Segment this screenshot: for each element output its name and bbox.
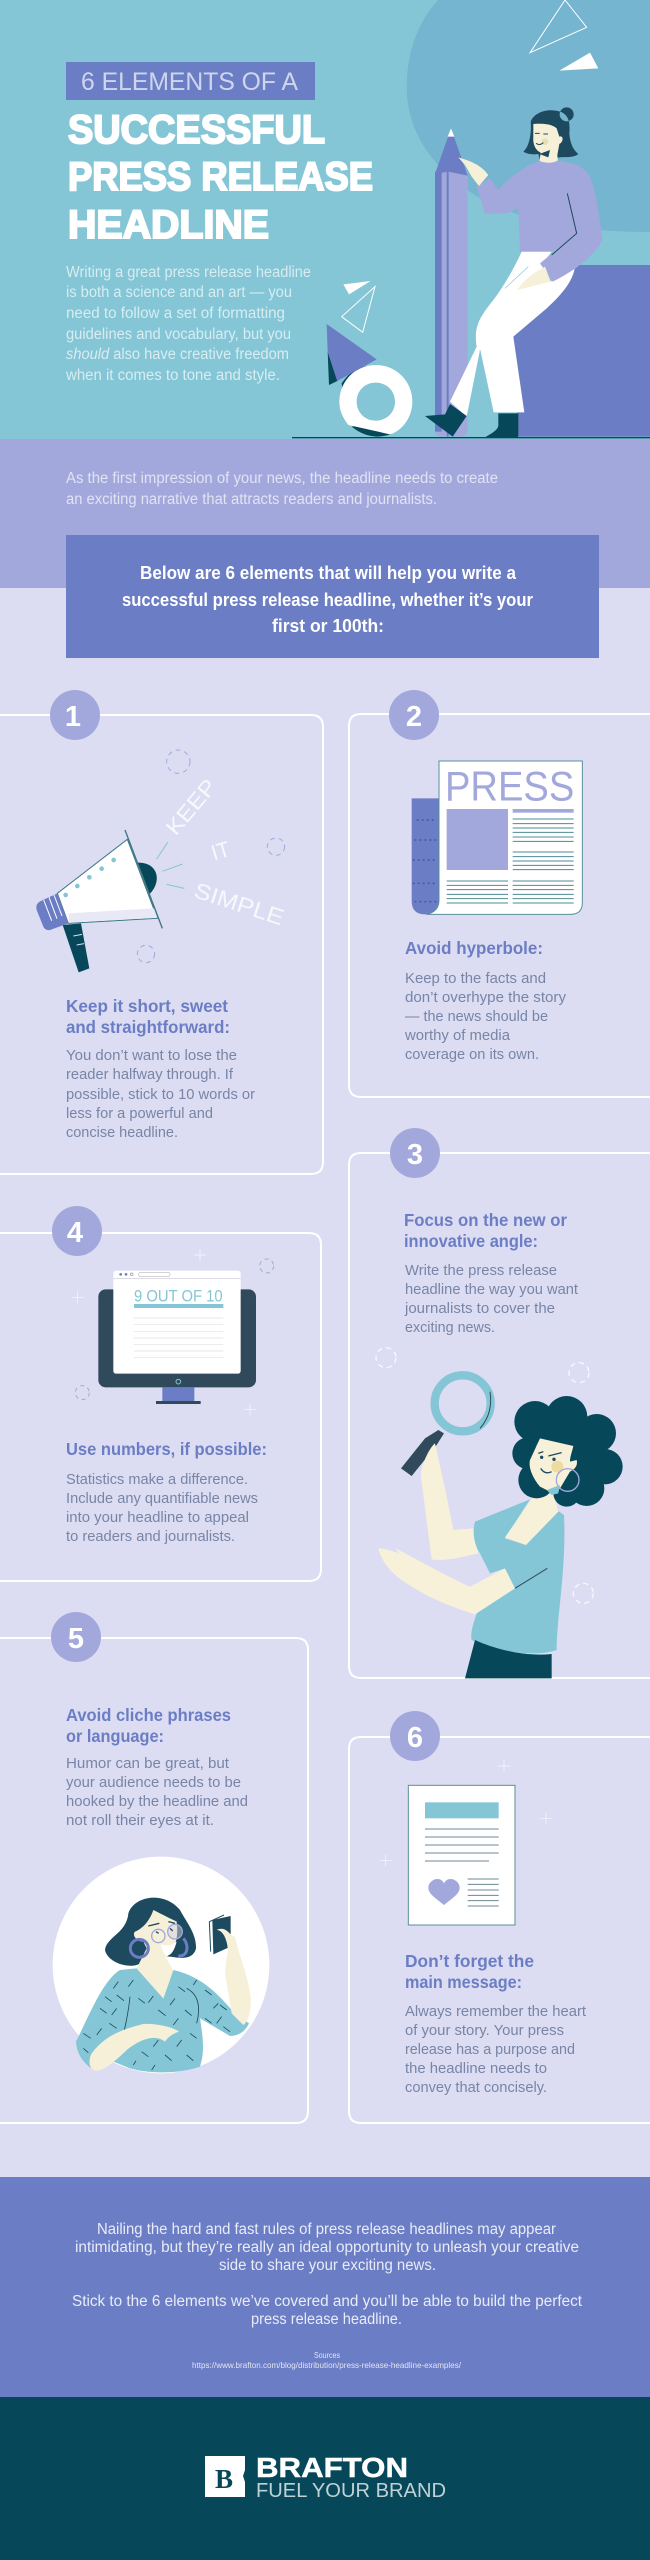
illustration: woman with phone <box>53 1857 269 2073</box>
number badge 5: 5 <box>68 1623 84 1655</box>
number badge 4 <box>52 1206 102 1256</box>
illustration: newspaper <box>412 761 582 914</box>
panel: header <box>0 0 650 440</box>
heading 2: Avoid hyperbole: <box>405 938 543 958</box>
body 4: Include any quantifiable news <box>66 1490 258 1507</box>
body 2: — the news should be <box>405 1008 548 1025</box>
heading 3: Focus on the new or <box>404 1210 567 1230</box>
illustration: megaphone <box>36 750 287 972</box>
body 1: less for a powerful and <box>66 1105 213 1122</box>
number badge 3 <box>390 1128 440 1178</box>
ring shape <box>339 365 412 437</box>
keep it simple words <box>161 774 287 930</box>
illustration: woman with pencil and shapes <box>292 0 650 438</box>
illustration: newspaper: PRESS <box>445 764 574 810</box>
callout: below are 6 elements: successful press release headline, whether it’s your <box>122 590 533 610</box>
body 4 <box>66 1471 258 1545</box>
body 4: to readers and journalists. <box>66 1528 235 1545</box>
number badge 2 <box>389 690 439 740</box>
heading 6: Don’t forget the <box>405 1951 534 1971</box>
small outline triangle <box>342 287 375 332</box>
panel: element 5 <box>0 1612 308 2123</box>
heading 1: and straightforward: <box>66 1017 230 1037</box>
heading 1 <box>66 996 230 1037</box>
heading 5 <box>66 1705 231 1746</box>
body 6: of your story. Your press <box>405 2022 564 2039</box>
body 5: not roll their eyes at it. <box>66 1812 214 1829</box>
sources: Sources <box>314 2350 340 2360</box>
title: SUCCESSFUL <box>68 108 325 152</box>
intro text: guidelines and vocabulary, but you <box>66 326 291 343</box>
heading 6: main message: <box>405 1972 522 1992</box>
body 1: You don’t want to lose the <box>66 1047 237 1064</box>
intro text: is both a science and an art — you <box>66 284 292 301</box>
brafton logo: FUEL YOUR BRAND <box>256 2480 446 2502</box>
body 2 <box>404 970 567 1063</box>
body 2: Keep to the facts and <box>405 970 546 987</box>
intro band text <box>66 470 498 508</box>
body 4: Statistics make a difference. <box>66 1471 248 1488</box>
panel: element 4 <box>0 1206 321 1581</box>
tag: 6 elements of a <box>66 62 315 100</box>
body 3 <box>404 1262 579 1336</box>
conclusion text: Nailing the hard and fast rules of press release headlines may appear <box>97 2221 556 2238</box>
body 5: Humor can be great, but <box>66 1755 230 1772</box>
panel: element 2 <box>349 690 650 1097</box>
body 5: hooked by the headline and <box>66 1793 248 1810</box>
heading 5: Avoid cliche phrases <box>66 1705 231 1725</box>
body 5 <box>66 1755 248 1829</box>
title: PRESS RELEASE <box>68 155 373 199</box>
sources: https://www.brafton.com/blog/distribution/press-release-headline-examples/ <box>192 2360 462 2370</box>
panel: element 6 <box>349 1711 650 2123</box>
body 3: journalists to cover the <box>404 1300 555 1317</box>
conclusion text: side to share your exciting news. <box>219 2257 436 2274</box>
conclusion text: intimidating, but they’re really an ideal opportunity to unleash your creative <box>75 2239 579 2256</box>
body 6 <box>405 2003 587 2096</box>
callout: below are 6 elements: Below are 6 elements that will help you write a <box>140 563 517 583</box>
body 6: convey that concisely. <box>405 2079 547 2096</box>
panel: element 3 <box>349 1128 650 1678</box>
body 4: into your headline to appeal <box>66 1509 249 1526</box>
number badge 6: 6 <box>407 1722 423 1754</box>
body 3: headline the way you want <box>405 1281 579 1298</box>
heading 1: Keep it short, sweet <box>66 996 228 1016</box>
callout: below are 6 elements: first or 100th: <box>272 616 384 636</box>
keep it simple words: IT <box>208 836 233 865</box>
body 3: exciting news. <box>405 1319 495 1336</box>
intro text: should also have creative freedom <box>66 346 289 363</box>
conclusion text: Stick to the 6 elements we’ve covered and you’ll be able to build the perfect <box>72 2293 583 2310</box>
body 1 <box>66 1047 255 1141</box>
number badge 1 <box>50 690 100 740</box>
brafton logo: BRAFTON <box>256 2452 408 2483</box>
keep it simple words: KEEP <box>161 774 222 840</box>
pencil <box>435 128 468 437</box>
panel: conclusion <box>0 2177 650 2397</box>
heading 5: or language: <box>66 1726 164 1746</box>
number badge 1: 1 <box>65 701 81 733</box>
number badge 4: 4 <box>67 1217 83 1249</box>
panel: element 1 <box>0 690 323 1174</box>
heading 3 <box>404 1210 567 1251</box>
body 1: possible, stick to 10 words or <box>66 1086 255 1103</box>
number badge 5 <box>51 1612 101 1662</box>
body 1: reader halfway through. If <box>66 1066 234 1083</box>
woman <box>425 107 602 437</box>
conclusion text: press release headline. <box>251 2311 402 2328</box>
callout: below are 6 elements <box>66 535 599 658</box>
intro text: Writing a great press release headline <box>66 264 311 281</box>
title <box>68 108 373 247</box>
body 6: release has a purpose and <box>405 2041 575 2058</box>
intro text <box>65 264 311 384</box>
panel: lavender intro band <box>0 439 650 588</box>
intro band text: an exciting narrative that attracts readers and journalists. <box>66 491 437 508</box>
keep it simple words: SIMPLE <box>191 878 287 930</box>
intro band text: As the first impression of your news, the headline needs to create <box>66 470 498 487</box>
illustration: woman with magnifying glass <box>376 1348 623 1678</box>
illustration: press release document <box>380 1760 552 1925</box>
outline triangle top <box>530 0 587 53</box>
tag: 6 elements of a: 6 ELEMENTS OF A <box>81 68 298 96</box>
number badge 2: 2 <box>406 701 422 733</box>
panel: footer <box>0 2397 650 2560</box>
intro text: when it comes to tone and style. <box>65 367 280 384</box>
title: HEADLINE <box>68 203 269 247</box>
body 6: the headline needs to <box>405 2060 547 2077</box>
body 3: Write the press release <box>405 1262 557 1279</box>
small white triangle <box>343 281 371 294</box>
white triangle top <box>559 53 598 71</box>
body 5: your audience needs to be <box>66 1774 241 1791</box>
number badge 6 <box>390 1711 440 1761</box>
heading 3: innovative angle: <box>404 1231 538 1251</box>
body 2: coverage on its own. <box>405 1046 539 1063</box>
heading 6 <box>405 1951 534 1992</box>
brafton logo: B <box>215 2464 233 2494</box>
conclusion text <box>72 2221 583 2328</box>
body 6: Always remember the heart <box>405 2003 587 2020</box>
body 2: don’t overhype the story <box>405 989 567 1006</box>
brafton logo <box>205 2452 446 2502</box>
number badge 3: 3 <box>407 1139 423 1171</box>
illustration: monitor <box>71 1249 274 1415</box>
sources <box>192 2350 462 2370</box>
intro text: need to follow a set of formatting <box>66 305 285 322</box>
seat block <box>513 265 650 437</box>
blue cone <box>327 324 377 385</box>
illustration: monitor: 9 OUT OF 10 <box>134 1287 223 1306</box>
header background blob <box>407 0 650 232</box>
body 2: worthy of media <box>404 1027 511 1044</box>
heading 4: Use numbers, if possible: <box>66 1439 267 1459</box>
ground line <box>292 437 650 438</box>
body 1: concise headline. <box>66 1124 178 1141</box>
